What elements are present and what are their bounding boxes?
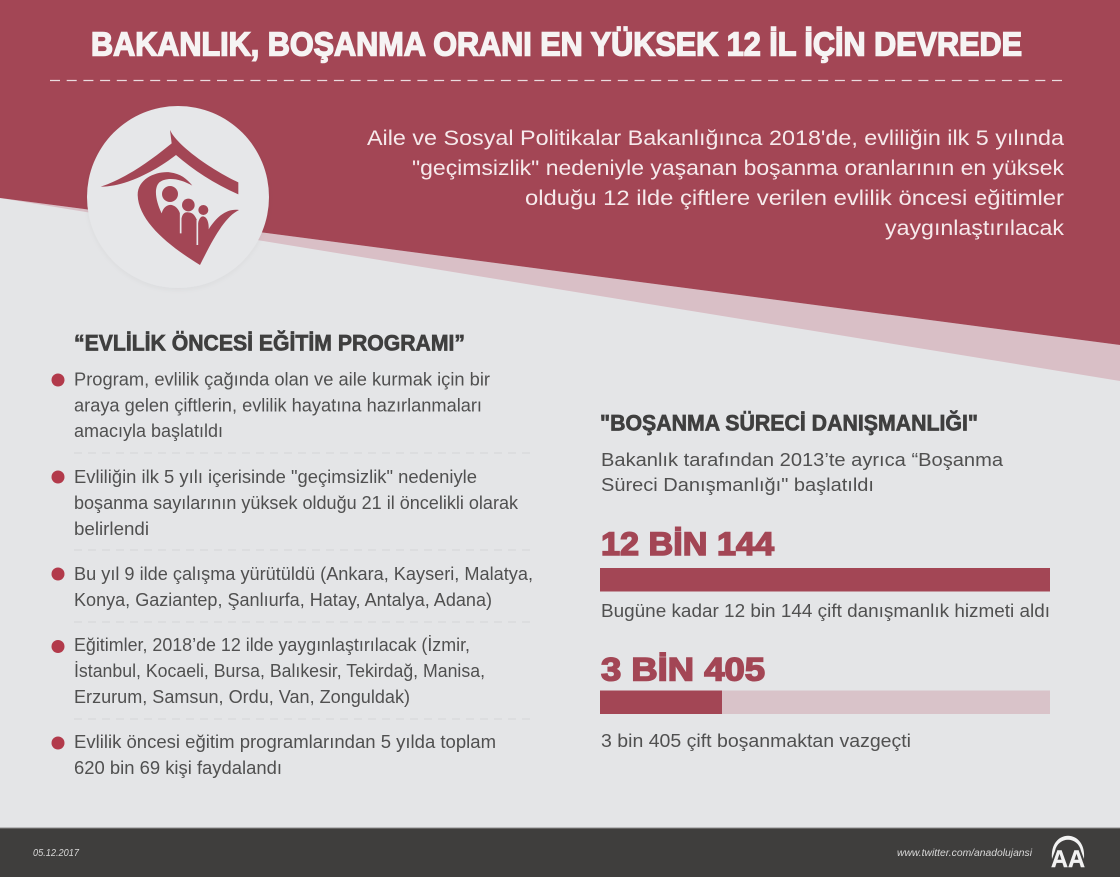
- caption: 3 bin 405: 3 bin 405 çift boşanmaktan vazgeçti: [601, 731, 911, 751]
- counselling description: [601, 450, 1004, 495]
- bullet item 4: [52, 635, 485, 707]
- bullet item 2: [52, 467, 519, 539]
- bullet item 5: Evlilik öncesi eğitim programlarından 5 yılda toplam: [74, 732, 496, 752]
- intro paragraph: olduğu 12 ilde çiftlere verilen evlilik öncesi eğitimler: [525, 187, 1064, 210]
- intro paragraph: [367, 127, 1065, 240]
- stat: 3 bin 405: 3 BİN 405: [601, 652, 765, 688]
- icon: AA logo: AA: [1051, 846, 1085, 873]
- bar: 12 bin 144: [600, 568, 1050, 592]
- source: www.twitter.com/anadolujansi: [897, 848, 1033, 859]
- bullet item 4: Erzurum, Samsun, Ordu, Van, Zonguldak): [74, 687, 410, 707]
- counselling description: Bakanlık tarafından 2013’te ayrıca “Boşanma: [601, 450, 1004, 470]
- counselling description: Süreci Danışmanlığı" başlatıldı: [601, 475, 874, 495]
- bullet item 5: 620 bin 69 kişi faydalandı: [74, 758, 282, 778]
- bullet item 1: Program, evlilik çağında olan ve aile kurmak için bir: [74, 370, 490, 390]
- bullet item 3: Konya, Gaziantep, Şanlıurfa, Hatay, Antalya, Adana): [74, 590, 492, 610]
- intro paragraph: Aile ve Sosyal Politikalar Bakanlığınca 2018'de, evliliğin ilk 5 yılında: [367, 127, 1064, 150]
- bullet item 2: Evliliğin ilk 5 yılı içerisinde "geçimsizlik" nedeniyle: [74, 467, 477, 487]
- bar: 3 bin 405: [600, 690, 1050, 714]
- heading: programme: “EVLİLİK ÖNCESİ EĞİTİM PROGRAMI”: [74, 330, 465, 356]
- bullet item 4: Eğitimler, 2018’de 12 ilde yaygınlaştırılacak (İzmir,: [74, 635, 470, 655]
- bullet item 5: [52, 732, 496, 778]
- footer bar: [0, 828, 1120, 877]
- panel: divorce counselling: [600, 410, 1050, 751]
- heading: counselling: "BOŞANMA SÜRECİ DANIŞMANLIĞI": [600, 410, 978, 436]
- bullet item 1: araya gelen çiftlerin, evlilik hayatına hazırlanmaları: [74, 396, 482, 416]
- bullet item 1: amacıyla başlatıldı: [74, 421, 223, 441]
- pale diagonal band: [0, 198, 1120, 381]
- bullet item 2: belirlendi: [74, 519, 149, 539]
- intro paragraph: "geçimsizlik" nedeniyle yaşanan boşanma oranlarının en yüksek: [412, 157, 1065, 180]
- red header background: [0, 0, 1120, 345]
- stat: 12 bin 144: 12 BİN 144: [601, 526, 774, 562]
- bullet item 2: boşanma sayılarının yüksek olduğu 21 il öncelikli olarak: [74, 493, 519, 513]
- bullet item 1: [52, 370, 490, 441]
- bullet item 3: [52, 564, 533, 610]
- date: 05.12.2017: [33, 848, 79, 859]
- title: BAKANLIK, BOŞANMA ORANI EN YÜKSEK 12 İL İÇİN DEVREDE: [91, 26, 1022, 62]
- icon: family heart under roof: [87, 106, 269, 288]
- intro paragraph: yaygınlaştırılacak: [885, 217, 1065, 240]
- bullet item 3: Bu yıl 9 ilde çalışma yürütüldü (Ankara, Kayseri, Malatya,: [74, 564, 533, 584]
- bullet item 4: İstanbul, Kocaeli, Bursa, Balıkesir, Tekirdağ, Manisa,: [74, 661, 485, 681]
- caption: 12 bin 144: Bugüne kadar 12 bin 144 çift danışmanlık hizmeti aldı: [601, 601, 1050, 621]
- panel: premarital education programme: [52, 330, 533, 778]
